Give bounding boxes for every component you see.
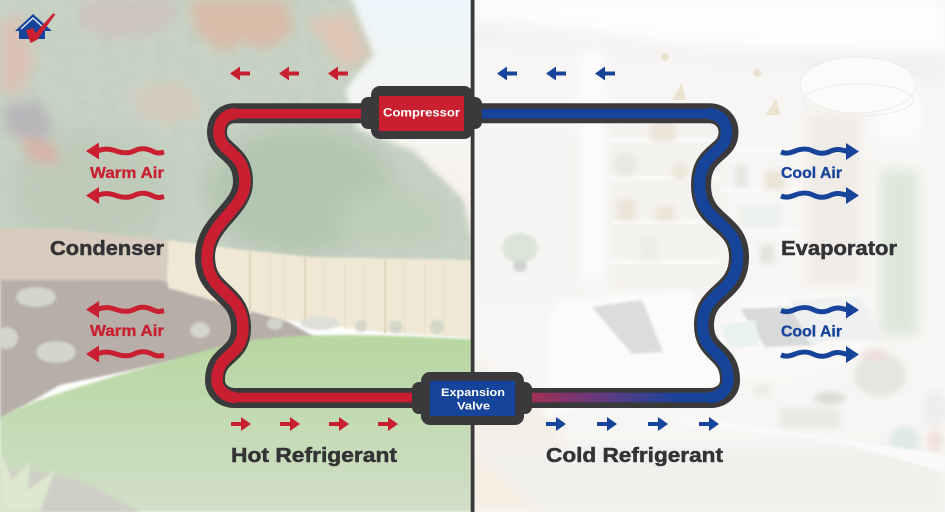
refrigerant pipe loop [205,113,739,398]
compressor [361,86,482,139]
heading: condenser: Condenser [50,237,164,260]
label: cool air upper: Cool Air [781,165,842,182]
sofas [546,408,554,418]
warm air wavy arrows [86,142,164,362]
compressor: Compressor [383,108,461,120]
top red arrows pointing left [230,66,348,80]
cold refrigerant: blue top straight [481,114,710,398]
pipe casing: left half [205,113,413,398]
chandelier [800,57,916,116]
flowers and decor [753,349,945,454]
dark mulch bottom-left [0,470,140,512]
label: warm air lower: Warm Air [90,323,164,340]
sconces [661,53,780,115]
main fence [168,240,472,338]
label: warm air upper: Warm Air [90,165,164,182]
plant and side table [502,233,538,272]
cool air wavy arrows [781,143,859,363]
expansion valve: Valve [457,400,490,412]
bottom blue arrows pointing right [546,417,719,431]
bottom red arrows pointing right [231,417,398,431]
heading: hot refrigerant: Hot Refrigerant [231,444,397,467]
tree canopy [0,0,480,270]
shrubs and plants [0,287,444,363]
hot refrigerant: red channel straights [235,114,413,398]
coffee table [856,445,943,470]
panel: indoor living room background [472,0,945,512]
pipe casing: right half [481,113,739,398]
expansion valve [412,372,532,425]
expansion valve: Expansion [441,387,505,399]
cold refrigerant: blue channel curve [700,114,738,398]
gradient section of pipe [531,393,681,402]
divider line [471,0,474,512]
label: cool air lower: Cool Air [781,324,842,340]
panel: outdoor garden background [0,0,480,512]
back fence on left [0,228,168,285]
mulch bed [0,280,320,420]
hot refrigerant: red channel curve [207,114,245,398]
top blue arrows pointing left [497,66,615,80]
lawn [0,335,472,512]
heading: cold refrigerant: Cold Refrigerant [546,444,723,467]
bookshelves [616,140,718,262]
heading: evaporator: Evaporator [781,237,897,260]
logo: house with check mark [15,14,56,43]
